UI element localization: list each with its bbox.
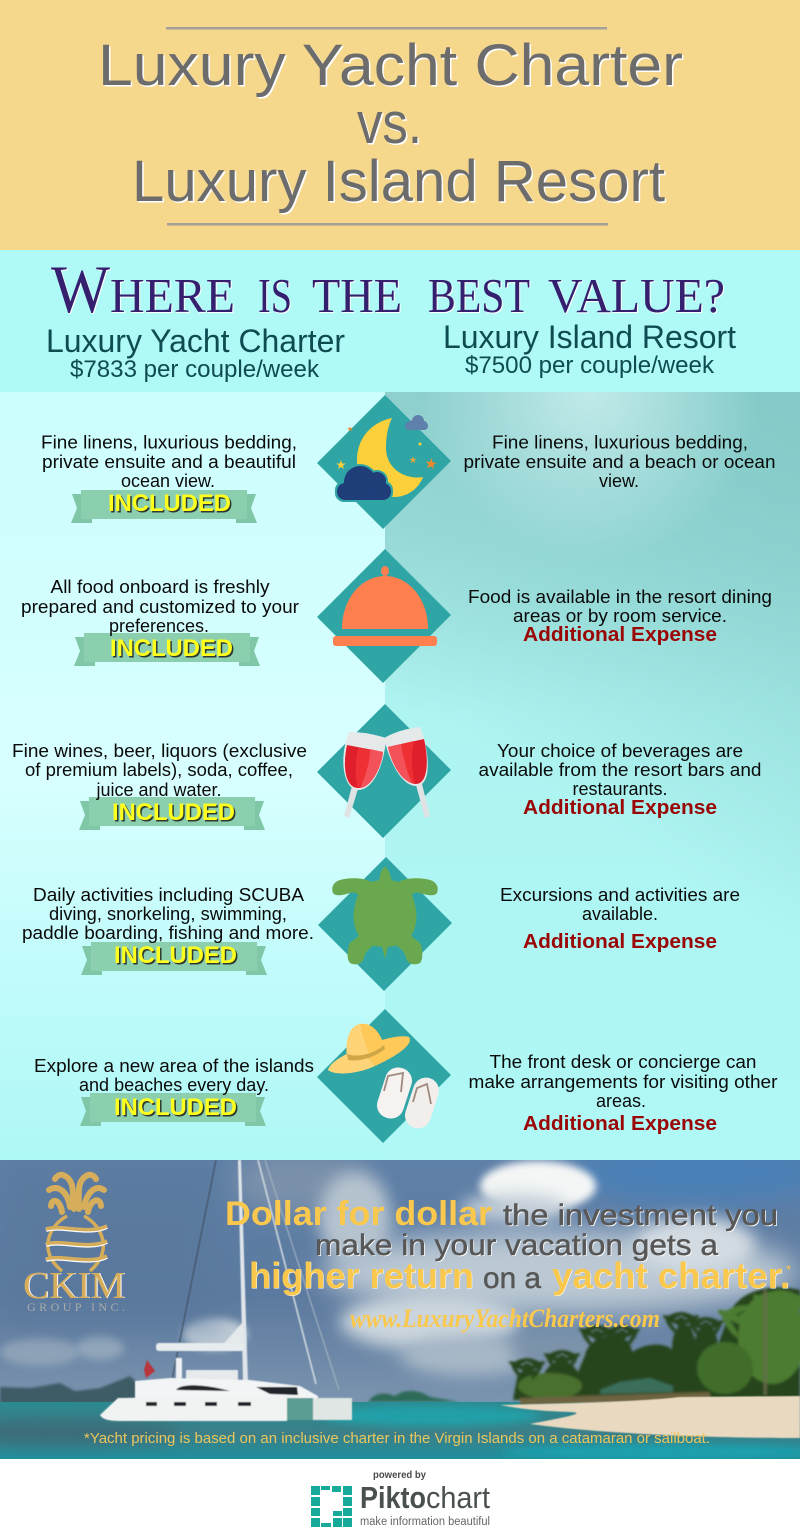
photo: distant hills (0, 1376, 460, 1404)
callout: dollar for dollar: the investment you (504, 1200, 779, 1233)
panel: piktochart footer (0, 1459, 800, 1539)
yacht charter price heading (46, 323, 345, 383)
resort drinks text: restaurants. (572, 779, 668, 799)
row 5: exploring (34, 1009, 778, 1143)
icon: piktochart mark (311, 1486, 352, 1527)
included ribbon: INCLUDED (114, 800, 236, 828)
yacht exploring text: and beaches every day. (79, 1075, 269, 1095)
logo: CKIM Group: CKIM (23, 1265, 125, 1307)
panel: yacht charter column background (0, 392, 385, 1160)
piktochart wordmark: Pikto (360, 1480, 426, 1515)
heading: where is the best value: W (52, 252, 112, 328)
photo: beach (500, 1396, 800, 1438)
callout: dollar for dollar: higher return (249, 1255, 474, 1296)
photo: catamaran (100, 1160, 352, 1421)
resort exploring text: areas. (596, 1091, 646, 1111)
piktochart wordmark: chart (426, 1480, 490, 1515)
callout: dollar for dollar: yacht charter. (552, 1255, 790, 1296)
resort food text (468, 587, 772, 646)
icon: moon and clouds on diamond (317, 395, 451, 529)
yacht activities text: diving, snorkeling, swimming, (49, 904, 287, 924)
heading: where is the best value: HERE (110, 268, 235, 323)
heading: where is the best value: THE (312, 268, 402, 323)
yacht activities text (22, 885, 314, 943)
yacht bedding text: private ensuite and a beautiful (42, 452, 296, 472)
icon: food cloche on diamond (317, 549, 451, 683)
island resort price heading: $7500 per couple/week (465, 352, 715, 379)
yacht food text: All food onboard is freshly (50, 577, 270, 597)
title: Luxury Island Resort (134, 150, 666, 216)
callout: dollar for dollar: the investment you (503, 1199, 778, 1232)
yacht drinks text (12, 741, 307, 800)
footnote: *Yacht pricing is based on an inclusive charter in the Virgin Islands on a catamaran or sailboat. (84, 1430, 710, 1447)
title: vs. (357, 91, 422, 156)
resort exploring text: make arrangements for visiting other (468, 1072, 778, 1092)
title: Luxury Yacht Charter (98, 33, 683, 98)
resort activities text: Excursions and activities are (500, 885, 740, 905)
heading: where is the best value: IS (259, 269, 293, 324)
yacht drinks text: juice and water. (95, 780, 222, 800)
resort exploring text (468, 1052, 778, 1135)
yacht bedding text: ocean view. (121, 471, 215, 491)
resort food text: Food is available in the resort dining (468, 587, 772, 607)
yacht bedding text (41, 432, 297, 491)
resort drinks text: Additional Expense (523, 797, 717, 819)
panel: comparison heading band (0, 250, 800, 392)
heading: where is the best value (51, 251, 726, 328)
yacht exploring text (34, 1056, 314, 1095)
heading: where is the best value: THE (313, 269, 403, 324)
included ribbon: INCLUDED (114, 942, 237, 969)
callout: dollar for dollar: * (786, 1262, 791, 1277)
included ribbon: INCLUDED (114, 1094, 237, 1121)
title: vs. (358, 92, 424, 158)
logo: CKIM Group: CKIM (24, 1265, 126, 1307)
yacht activities text: Daily activities including SCUBA (33, 885, 304, 905)
included ribbon (74, 633, 260, 666)
resort bedding text: view. (599, 471, 639, 491)
callout: dollar for dollar: make in your vacation gets a (315, 1229, 718, 1262)
resort exploring text: The front desk or concierge can (490, 1052, 756, 1072)
yacht exploring text: Explore a new area of the islands (34, 1056, 314, 1076)
yacht charter price heading: Luxury Yacht Charter (46, 323, 345, 359)
heading: where is the best value: BEST (429, 269, 531, 324)
heading: where is the best value: BEST (428, 268, 530, 323)
icon: wine glasses on diamond (317, 704, 451, 838)
yacht charter price heading: $7833 per couple/week (70, 356, 320, 383)
row 2: food (21, 549, 772, 683)
included ribbon: INCLUDED (112, 799, 235, 826)
included ribbon: INCLUDED (116, 944, 238, 970)
yacht food text: preferences. (109, 616, 209, 636)
title: Luxury Island Resort (132, 149, 665, 214)
title: Luxury Yacht Charter (100, 34, 684, 100)
callout: dollar for dollar: yacht charter. (552, 1256, 790, 1296)
heading: where is the best value: W (51, 251, 111, 327)
resort activities text: Additional Expense (523, 931, 717, 953)
powered by label: powered by (373, 1469, 426, 1481)
logo: CKIM Group: GROUP INC. (27, 1300, 125, 1314)
resort exploring text: Additional Expense (523, 1113, 717, 1135)
yacht drinks text: of premium labels), soda, coffee, (25, 760, 293, 780)
photo: palm trees (508, 1288, 800, 1405)
logo: CKIM Group (23, 1175, 126, 1314)
included ribbon: INCLUDED (110, 492, 232, 518)
heading: where is the best value: IS (258, 268, 292, 323)
included ribbon: INCLUDED (110, 635, 233, 662)
icon: turtle on diamond (318, 857, 452, 991)
island resort price heading: Luxury Island Resort (443, 319, 736, 355)
resort drinks text: available from the resort bars and (478, 760, 762, 780)
resort bedding text: private ensuite and a beach or ocean (464, 452, 776, 472)
resort bedding text (464, 432, 776, 491)
icon: pineapple (46, 1175, 107, 1271)
photo: sea (0, 1402, 800, 1460)
photo: sky and clouds (0, 1142, 800, 1410)
callout: dollar for dollar: on a (483, 1262, 541, 1295)
heading: where is the best value: VALUE? (548, 268, 725, 323)
callout: dollar for dollar: make in your vacation gets a (316, 1230, 719, 1263)
included ribbon: INCLUDED (116, 1096, 238, 1122)
yacht food text: prepared and customized to your (21, 597, 299, 617)
resort bedding text: Fine linens, luxurious bedding, (492, 432, 748, 452)
included ribbon: INCLUDED (112, 636, 234, 664)
callout: dollar for dollar (225, 1195, 791, 1296)
piktochart wordmark: make information beautiful (360, 1516, 490, 1528)
resort food text: areas or by room service. (513, 606, 727, 626)
included ribbon (81, 942, 267, 975)
website url: www.LuxuryYachtCharters.com (350, 1304, 660, 1333)
yacht food text (21, 577, 299, 636)
included ribbon (79, 797, 265, 830)
included ribbon: INCLUDED (108, 490, 231, 517)
heading: where is the best value: HERE (111, 269, 236, 324)
callout: dollar for dollar: higher return (250, 1256, 474, 1296)
piktochart wordmark (360, 1480, 490, 1528)
heading: where is the best value: VALUE? (549, 269, 726, 324)
resort activities text: available. (582, 904, 658, 924)
panel: title header (0, 0, 800, 250)
row 1: bedding (41, 395, 776, 529)
yacht drinks text: Fine wines, beer, liquors (exclusive (12, 741, 307, 761)
resort drinks text: Your choice of beverages are (497, 741, 743, 761)
row 3: drinks (12, 704, 762, 838)
callout: dollar for dollar: Dollar for dollar (225, 1195, 492, 1233)
panel: island resort column background (385, 392, 800, 1160)
yacht bedding text: Fine linens, luxurious bedding, (41, 432, 297, 452)
icon: sun hat and flip-flops on diamond (317, 1009, 451, 1143)
resort activities text (500, 885, 740, 953)
resort food text: Additional Expense (523, 624, 717, 646)
included ribbon (80, 1093, 266, 1126)
yacht activities text: paddle boarding, fishing and more. (22, 923, 314, 943)
island resort price heading (443, 319, 736, 379)
row 4: activities (22, 857, 740, 991)
included ribbon (71, 490, 257, 523)
panel: yacht photo banner (0, 1142, 800, 1460)
title (98, 33, 684, 216)
resort drinks text (478, 741, 762, 819)
